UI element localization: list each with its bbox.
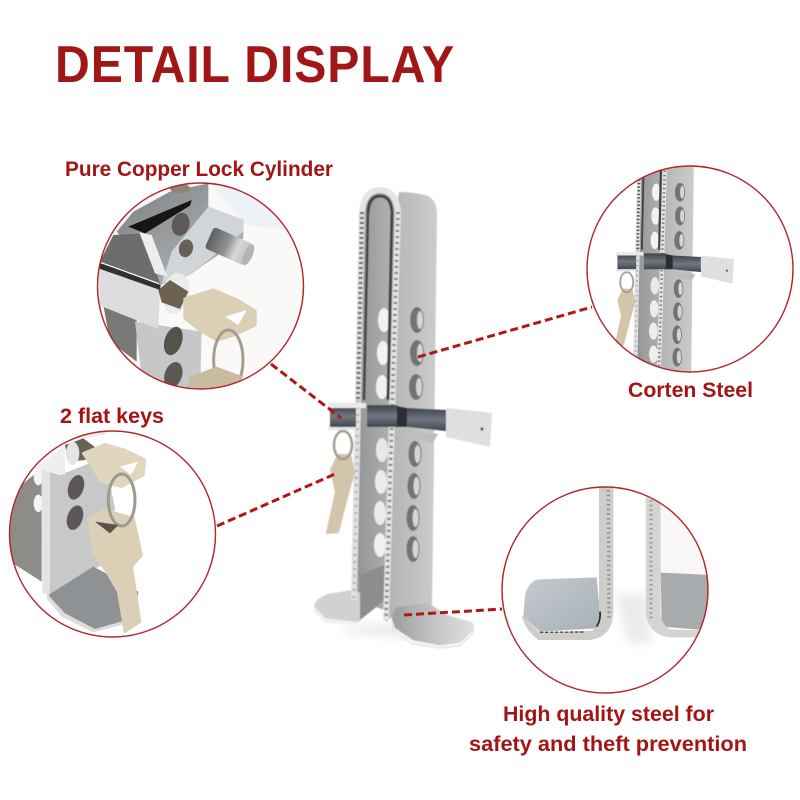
label: steel quality line 1: High quality steel for bbox=[503, 703, 714, 726]
circle outline bbox=[98, 183, 304, 389]
panel: corten steel close-up bbox=[586, 165, 794, 373]
label: corten steel: Corten Steel bbox=[628, 379, 753, 402]
product photo: pedal lock bbox=[314, 188, 492, 648]
dashed arrow: steel foot bbox=[404, 609, 502, 615]
circle outline bbox=[10, 431, 216, 637]
label: flat keys: 2 flat keys bbox=[60, 405, 164, 428]
panel: flat keys close-up bbox=[8, 430, 216, 638]
label: lock cylinder: Pure Copper Lock Cylinder bbox=[65, 158, 333, 181]
panel: steel foot close-up bbox=[501, 486, 709, 694]
panel: lock cylinder close-up bbox=[96, 182, 304, 390]
dashed arrow: lock cylinder bbox=[271, 364, 341, 418]
dashed arrow: corten steel bbox=[418, 307, 592, 357]
circle outline bbox=[587, 166, 793, 372]
circle outline bbox=[502, 487, 708, 693]
title: DETAIL DISPLAY bbox=[55, 36, 455, 94]
dashed arrow: flat keys bbox=[217, 474, 335, 526]
label: steel quality line 2: safety and theft prevention bbox=[469, 733, 747, 756]
